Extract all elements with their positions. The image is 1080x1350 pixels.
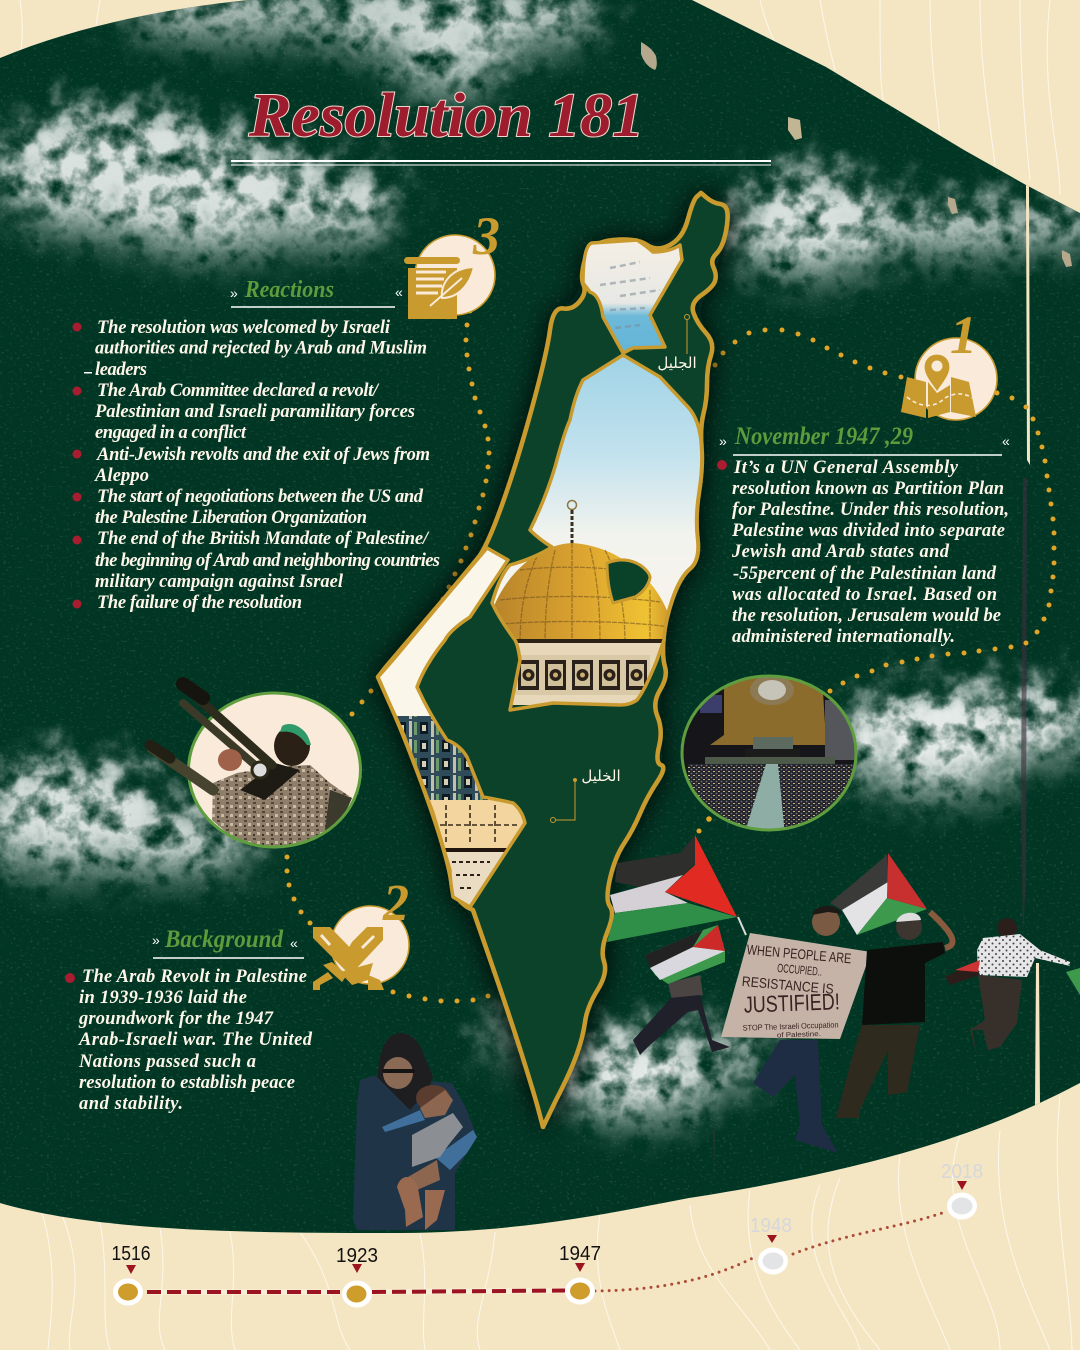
bullet text bbox=[94, 318, 440, 613]
map outline bbox=[378, 193, 728, 1127]
icon 1: map and pin bbox=[901, 305, 997, 420]
heading: November 1947 ,29 bbox=[734, 423, 913, 450]
sight ring bbox=[252, 762, 268, 778]
bullet text: The resolution was welcomed by Israeli bbox=[97, 318, 391, 338]
heading: Reactions bbox=[244, 277, 334, 303]
body text: for Palestine. Under this resolution, bbox=[732, 500, 1009, 520]
timeline bbox=[112, 1161, 983, 1308]
smoke cloud: right middle bbox=[840, 690, 1080, 797]
body text: -55percent of the Palestinian land bbox=[733, 564, 997, 584]
node 1516: 1516 bbox=[112, 1243, 150, 1265]
section: Reactions bbox=[72, 277, 440, 613]
cutout: coastal strip bbox=[380, 550, 524, 904]
protest sign: JUSTIFIED! bbox=[743, 988, 840, 1018]
heading bbox=[230, 277, 403, 307]
label: Galilee: الجليل bbox=[657, 354, 697, 372]
cutout: central sky with dome bbox=[485, 355, 710, 705]
body text bbox=[731, 458, 1009, 647]
protest sign: STOP The Israeli Occupation bbox=[742, 1020, 839, 1033]
heading: « bbox=[290, 935, 298, 951]
node 1923 bbox=[336, 1245, 378, 1308]
bullet text: The end of the British Mandate of Palestine/ bbox=[97, 529, 430, 549]
protest sign: WHEN PEOPLE ARE bbox=[746, 941, 852, 966]
bullet markers bbox=[72, 322, 92, 608]
photo: woman holding baby bbox=[353, 1033, 477, 1230]
node 1516 bbox=[112, 1243, 150, 1306]
bullet text: The start of negotiations between the US and bbox=[97, 487, 424, 507]
body text: the resolution, Jerusalem would be bbox=[732, 606, 1001, 626]
protest sign bbox=[721, 933, 871, 1041]
icon 1: map and pin: 1 bbox=[950, 305, 977, 365]
paint streaks bbox=[713, 185, 1040, 1177]
smoke cloud: upper right bbox=[730, 178, 1080, 278]
smoke cloud: left middle bbox=[0, 765, 255, 875]
body text: The Arab Revolt in Palestine bbox=[82, 967, 307, 987]
protest sign: OCCUPIED.. bbox=[777, 961, 823, 979]
icon 3: scroll and feather bbox=[404, 206, 500, 319]
bullet text: military campaign against Israel bbox=[95, 572, 344, 592]
heading: Background bbox=[164, 926, 283, 953]
heading: « bbox=[1002, 433, 1010, 449]
bullet text: the Palestine Liberation Organization bbox=[95, 508, 367, 528]
bullet text: leaders bbox=[95, 360, 147, 380]
body text: and stability. bbox=[79, 1094, 183, 1114]
body text: in 1939-1936 laid the bbox=[79, 988, 247, 1008]
leaf flecks bbox=[641, 42, 1072, 267]
icon 2: crossed swords: 2 bbox=[382, 875, 409, 932]
heading: » bbox=[152, 932, 160, 948]
node 2018 bbox=[941, 1161, 983, 1220]
golden dome bbox=[494, 543, 667, 639]
label: Hebron: الخليل bbox=[581, 767, 621, 785]
fighter's head bbox=[218, 724, 311, 771]
bullet marker bbox=[65, 973, 75, 983]
smoke cloud: top bbox=[120, 0, 595, 97]
smoke cloud: upper left bbox=[0, 113, 395, 255]
bullet text: Anti-Jewish revolts and the exit of Jews from bbox=[96, 445, 430, 465]
body text: resolution known as Partition Plan bbox=[732, 479, 1004, 499]
body text: was allocated to Israel. Based on bbox=[732, 585, 997, 605]
ornamental band bbox=[512, 643, 661, 705]
icon 3: scroll and feather: 3 bbox=[472, 206, 500, 266]
node 1947: 1947 bbox=[559, 1243, 601, 1265]
photo: fighter with launcher bbox=[150, 684, 360, 850]
bullet text: Palestinian and Israeli paramilitary forces bbox=[94, 402, 415, 422]
cutout: hole in dome area bbox=[607, 560, 650, 603]
spire bbox=[568, 500, 576, 545]
cutout: northern sky bbox=[584, 242, 680, 350]
man with sign bbox=[753, 906, 842, 1153]
protest sign: RESISTANCE IS bbox=[741, 973, 834, 997]
body text: administered internationally. bbox=[732, 627, 955, 647]
cutout outlines bbox=[378, 240, 702, 907]
dotted connector paths bbox=[284, 308, 1056, 1004]
heading: » bbox=[719, 433, 727, 449]
title: Resolution 181 bbox=[248, 82, 644, 150]
node 1947 bbox=[559, 1243, 601, 1304]
bullet text: The Arab Committee declared a revolt/ bbox=[97, 381, 380, 401]
label: Hebron bbox=[550, 767, 621, 822]
man in black with flag bbox=[830, 853, 953, 1118]
man running right bbox=[945, 918, 1080, 1055]
heading: « bbox=[395, 284, 403, 300]
heading bbox=[719, 423, 1010, 455]
node 2018: 2018 bbox=[941, 1161, 983, 1183]
body text: groundwork for the 1947 bbox=[78, 1009, 274, 1029]
node 1948: 1948 bbox=[750, 1215, 792, 1237]
label: Galilee bbox=[657, 314, 697, 372]
body text: It’s a UN General Assembly bbox=[733, 458, 959, 478]
body text: Palestine was divided into separate bbox=[731, 521, 1005, 541]
photo: protesters with flags bbox=[607, 835, 1080, 1153]
bullet text: the beginning of Arab and neighboring countries bbox=[95, 551, 440, 571]
protest sign: of Palestine. bbox=[777, 1031, 821, 1039]
body text: Arab-Israeli war. The United bbox=[78, 1030, 313, 1050]
bullet text: Aleppo bbox=[94, 466, 149, 486]
icon 2: crossed swords bbox=[313, 875, 409, 990]
node 1923: 1923 bbox=[336, 1245, 378, 1267]
launchers bbox=[150, 684, 272, 790]
body text: resolution to establish peace bbox=[79, 1073, 295, 1093]
section: November 29, 1947 bbox=[717, 423, 1010, 647]
bullet text: authorities and rejected by Arab and Muslim bbox=[95, 338, 427, 358]
body text: Nations passed such a bbox=[78, 1052, 256, 1072]
body text: Jewish and Arab states and bbox=[731, 542, 950, 562]
node 1948 bbox=[750, 1215, 792, 1274]
bullet marker bbox=[717, 460, 727, 470]
walker with flag bbox=[633, 925, 730, 1055]
map of Palestine bbox=[370, 193, 728, 1127]
smoke cloud: bottom bbox=[486, 1007, 770, 1122]
section: Background bbox=[65, 926, 313, 1114]
bullet text: engaged in a conflict bbox=[95, 423, 247, 443]
photo: UN General Assembly bbox=[680, 675, 860, 835]
large flag bbox=[607, 835, 746, 942]
bullet text: The failure of the resolution bbox=[97, 593, 302, 613]
connecting lines bbox=[147, 1211, 948, 1292]
body text bbox=[78, 967, 313, 1114]
heading: » bbox=[230, 285, 238, 301]
